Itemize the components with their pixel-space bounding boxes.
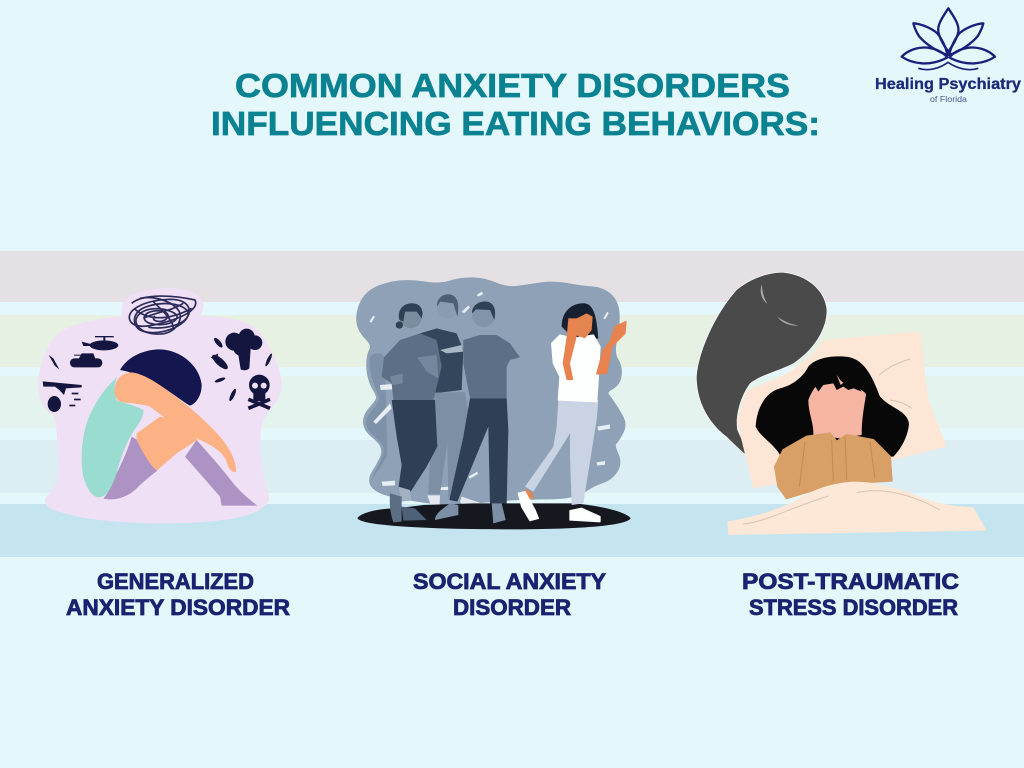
hands covering face [808,375,866,438]
illustration: post-traumatic stress [697,273,987,535]
logo: Healing Psychiatry of Florida [875,8,1021,104]
grenade [48,396,61,412]
label: generalized anxiety disorder [66,569,290,620]
shadow bubble outline [697,273,827,458]
icon: lotus [902,8,995,70]
label: social anxiety disorder: DISORDER [453,595,571,620]
hair [756,356,909,457]
label: post-traumatic stress disorder: POST-TRAUMATIC [742,569,959,594]
shoes over shadow [390,493,506,523]
label: social anxiety disorder [413,569,606,620]
helicopter [82,342,92,346]
blanket [727,482,987,535]
face [573,313,593,338]
label: generalized anxiety disorder: GENERALIZED [97,569,254,594]
label: post-traumatic stress disorder [742,569,959,620]
arm on face [563,318,578,380]
blanket creases [743,491,940,524]
rifle [43,381,82,395]
shadow bubble highlights [761,284,798,326]
person 3 [440,302,520,505]
label: social anxiety disorder: SOCIAL ANXIETY [413,569,606,594]
bullet left [49,355,59,369]
label: post-traumatic stress disorder: STRESS DISORDER [749,595,958,620]
lilac backdrop [38,288,282,523]
knee [137,417,197,471]
person 2 [420,294,482,510]
smoke darker patches [366,353,387,481]
hair back [562,303,598,340]
tank [70,358,102,367]
label: generalized anxiety disorder: ANXIETY DISORDER [66,595,290,620]
icons: explosion, bombs and skull, right [210,329,273,408]
smoke backdrop [359,280,623,502]
title: INFLUENCING EATING BEHAVIORS: [211,105,820,142]
sweater [775,433,892,498]
pillow creases [879,359,912,408]
shoes [518,492,538,521]
hair [120,349,202,406]
shorts [103,437,157,499]
hair strands over forehead [815,375,862,392]
pants [525,400,598,505]
logo wordmark: Healing Psychiatry [875,76,1021,93]
ground shadow [357,503,631,529]
title [211,67,820,142]
sock [185,440,257,506]
ankle [525,488,534,500]
bombs [213,337,224,349]
icons: war machines and weapons, left [43,336,118,412]
body: teal shirt [82,377,143,497]
woman in white [518,303,626,522]
shirt [552,335,600,402]
illustration: generalized anxiety [38,288,282,523]
skull [249,375,270,395]
sweater folds [799,437,875,487]
raised arm and hand [597,322,626,374]
illustration: social anxiety [357,280,631,529]
pillow [737,332,947,488]
icon: scribble [129,296,196,334]
person 1 [382,303,442,502]
smoke highlights [369,292,610,490]
title: COMMON ANXIETY DISORDERS [235,67,790,104]
explosion [225,333,243,351]
arm and head [114,373,236,472]
logo subtitle: of Florida [930,95,968,104]
